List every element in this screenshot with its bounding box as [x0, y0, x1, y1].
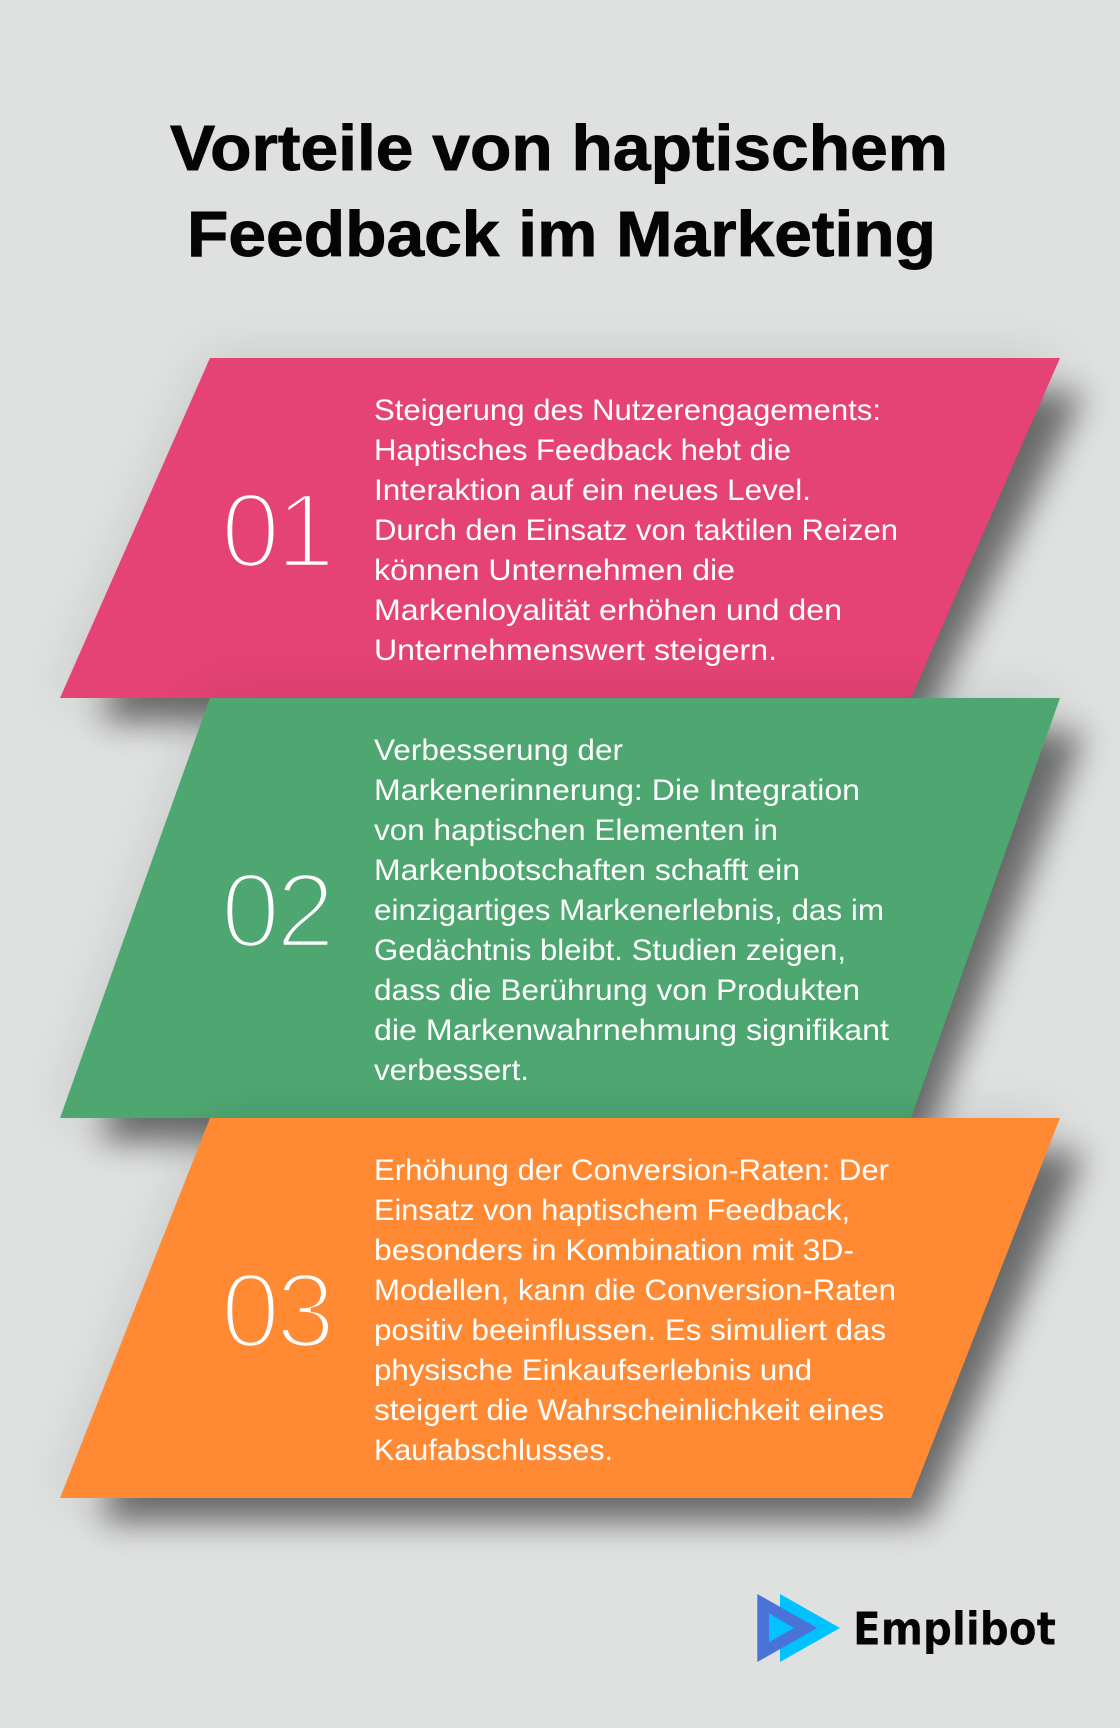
text: Steigerung des Nutzerengagements: Markenloyalität erhöhen und den	[374, 594, 842, 627]
text: Steigerung des Nutzerengagements: Steigerung des Nutzerengagements:	[374, 394, 881, 427]
title: Feedback im Marketing	[187, 198, 936, 270]
text: Erhöhung der Conversion-Raten: positiv beeinflussen. Es simuliert das	[374, 1314, 886, 1347]
logo: Emplibot	[757, 1594, 1056, 1662]
wordmark: Emplibot	[853, 1602, 1056, 1656]
text: Erhöhung der Conversion-Raten: besonders in Kombination mit 3D-	[374, 1234, 854, 1267]
text: Erhöhung der Conversion-Raten: Modellen, kann die Conversion-Raten	[374, 1274, 896, 1307]
panel: 02 Markenerinnerung	[60, 698, 1085, 1142]
text: Steigerung des Nutzerengagements: Unternehmenswert steigern.	[374, 634, 777, 667]
text: Verbesserung der Markenerinnerung: verbessert.	[374, 1054, 529, 1087]
text: Erhöhung der Conversion-Raten: steigert die Wahrscheinlichkeit eines	[374, 1394, 884, 1427]
text: Steigerung des Nutzerengagements: Durch den Einsatz von taktilen Reizen	[374, 514, 898, 547]
text: Verbesserung der Markenerinnerung	[374, 734, 890, 1087]
panel: 03 Conversion-Raten	[60, 1118, 1085, 1522]
number 01: 01	[221, 472, 331, 590]
text: Verbesserung der Markenerinnerung: dass die Berührung von Produkten	[374, 974, 860, 1007]
text: Erhöhung der Conversion-Raten: physische Einkaufserlebnis und	[374, 1354, 812, 1387]
text: Steigerung des Nutzerengagements	[374, 394, 898, 667]
text: Verbesserung der Markenerinnerung: Gedächtnis bleibt. Studien zeigen,	[374, 934, 846, 967]
text: Steigerung des Nutzerengagements: Haptisches Feedback hebt die	[374, 434, 791, 467]
text: Steigerung des Nutzerengagements: Interaktion auf ein neues Level.	[374, 474, 811, 507]
text: Verbesserung der Markenerinnerung: Markenerinnerung: Die Integration	[374, 774, 860, 807]
text: Verbesserung der Markenerinnerung: die Markenwahrnehmung signifikant	[374, 1014, 890, 1047]
text: Verbesserung der Markenerinnerung: Markenbotschaften schafft ein	[374, 854, 800, 887]
title	[170, 112, 948, 270]
text: Verbesserung der Markenerinnerung: einzigartiges Markenerlebnis, das im	[374, 894, 884, 927]
text: Erhöhung der Conversion-Raten: Einsatz von haptischem Feedback,	[374, 1194, 850, 1227]
text: Erhöhung der Conversion-Raten: Kaufabschlusses.	[374, 1434, 613, 1467]
number 03: 03	[221, 1252, 331, 1370]
panel: 01 Nutzerengagement	[60, 358, 1085, 722]
icon: play triangles	[757, 1594, 840, 1662]
text: Verbesserung der Markenerinnerung: von haptischen Elementen in	[374, 814, 778, 847]
number 02: 02	[221, 852, 331, 970]
title: Vorteile von haptischem	[170, 112, 948, 184]
text: Erhöhung der Conversion-Raten	[374, 1154, 896, 1467]
text: Verbesserung der Markenerinnerung: Verbesserung der	[374, 734, 623, 767]
text: Erhöhung der Conversion-Raten: Erhöhung der Conversion-Raten: Der	[374, 1154, 889, 1187]
text: Steigerung des Nutzerengagements: können Unternehmen die	[374, 554, 735, 587]
